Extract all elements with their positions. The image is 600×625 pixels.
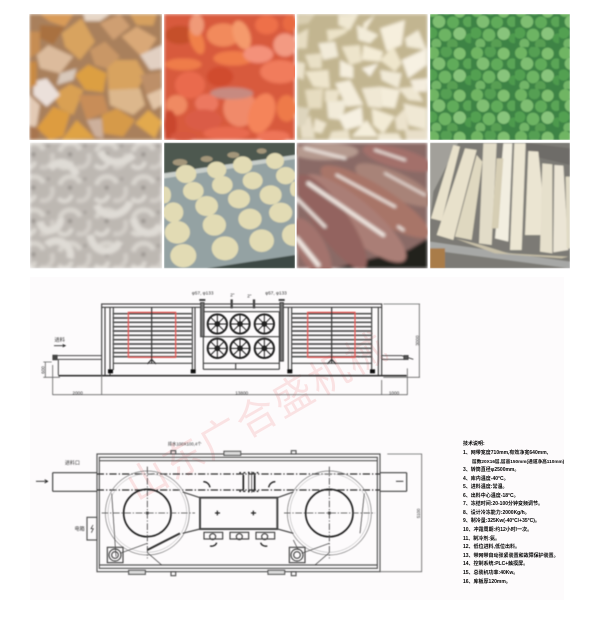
- dimension labels and callouts: 进料: [54, 335, 66, 343]
- technical specification list: 7、冻结时间:20-100分钟变频调节。: [463, 500, 543, 507]
- technical specification list: 14、控制系统:PLC+触摸屏。: [463, 560, 528, 567]
- infeed conveyor: [53, 355, 102, 360]
- red highlight frames: [128, 312, 355, 357]
- photo: green peas: [430, 14, 570, 140]
- photo: steamed buns on tray: [159, 143, 305, 268]
- conveyors in and out: [53, 473, 407, 491]
- dimension labels and callouts: φ57, φ133: [192, 290, 214, 295]
- plan labels: 进料口: [65, 460, 80, 467]
- plan labels: 排水100X100,4个: [168, 441, 202, 448]
- technical specification list: 15、总装机功率:40Kw。: [463, 569, 518, 576]
- fans under evaporator: [204, 532, 275, 540]
- technical specification list: 3、转筒直径φ2500mm。: [463, 466, 519, 473]
- technical specification list: 10、冲霜周期:约12小时/一次。: [463, 526, 532, 533]
- dimension lines: [43, 304, 420, 395]
- dimension labels and callouts: 2": [247, 293, 252, 298]
- technical specification list: 11、制冷剂:氨。: [463, 535, 500, 542]
- outer enclosure: [97, 451, 380, 576]
- technical specification list: 技术说明:: [463, 440, 485, 447]
- drawing sheet background: [30, 277, 564, 600]
- dimension labels and callouts: 2": [230, 293, 235, 298]
- belt tension return path: [112, 493, 364, 565]
- drawing: side elevation of spiral freezer: [40, 290, 420, 395]
- technical specification list: [463, 440, 565, 585]
- plan labels: [65, 441, 421, 533]
- photo: red shrimp: [163, 14, 300, 143]
- technical specification list: 16、库板厚120mm。: [463, 578, 511, 585]
- technical specification list: 12、低位进料,低位出料。: [463, 543, 520, 550]
- technical specification list: 6、出料中心温度-18°C。: [463, 492, 519, 499]
- photo: fried tofu cubes: [29, 14, 162, 140]
- plan labels: 5100: [416, 508, 421, 518]
- central evaporator: [183, 492, 293, 533]
- technical specification list: 13、带网带自动张紧装置和故障保护装置。: [463, 552, 559, 559]
- technical specification list: 5、进料温度:常温。: [463, 483, 507, 490]
- photo: white dumplings: [297, 14, 428, 140]
- spiral drive shafts: [147, 307, 336, 364]
- dimension labels and callouts: 3000: [415, 335, 420, 346]
- plan labels: 电箱: [75, 526, 85, 533]
- technical specification list: 层数20X16层,层高150mm(通道净高110mm): [472, 458, 565, 465]
- technical specification list: 1、网带宽度710mm,有效净宽640mm,: [463, 449, 549, 456]
- central belt tensioner: [239, 472, 260, 493]
- spiral belt tiers left: [113, 314, 192, 357]
- technical specification list: 4、库内温度-40°C。: [463, 475, 509, 482]
- six evaporator fans: [208, 314, 274, 358]
- refrigerant pipes: [199, 299, 285, 361]
- direction arrows: [203, 482, 275, 546]
- dimension labels and callouts: φ57, φ133: [265, 290, 287, 295]
- dimension labels and callouts: 13800: [235, 390, 249, 395]
- base beam and feet: [58, 360, 407, 376]
- dimension labels and callouts: 1000: [389, 390, 400, 395]
- infeed arrow: [54, 344, 65, 347]
- technical specification list: 8、设计冷冻能力:2000Kg/h。: [463, 509, 530, 516]
- photo: peeled shrimp: [30, 143, 162, 268]
- feed arrows: [36, 480, 403, 483]
- dimension labels and callouts: 2000: [72, 390, 83, 395]
- photo: squid: [296, 142, 428, 268]
- photo: white strips on a tray: [430, 143, 570, 268]
- dimension labels and callouts: 600: [40, 366, 45, 374]
- dimension labels and callouts: [40, 290, 420, 395]
- dimension line: [380, 454, 422, 572]
- outfeed conveyor: [382, 356, 413, 359]
- drawing: top plan of spiral freezer: [36, 441, 422, 576]
- left spiral drum: [102, 467, 195, 558]
- right spiral drum: [284, 467, 375, 558]
- electric box: [87, 517, 97, 540]
- watermark: 山东广合盛机械: [120, 325, 396, 510]
- photo grid: frozen foods: [29, 14, 570, 284]
- technical specification list: 9、制冷量:325Kw(-40°C/+35°C)。: [463, 517, 540, 524]
- drive motors: [107, 547, 305, 563]
- frame and insulated enclosure: [102, 304, 382, 375]
- spiral belt tiers right: [292, 314, 372, 357]
